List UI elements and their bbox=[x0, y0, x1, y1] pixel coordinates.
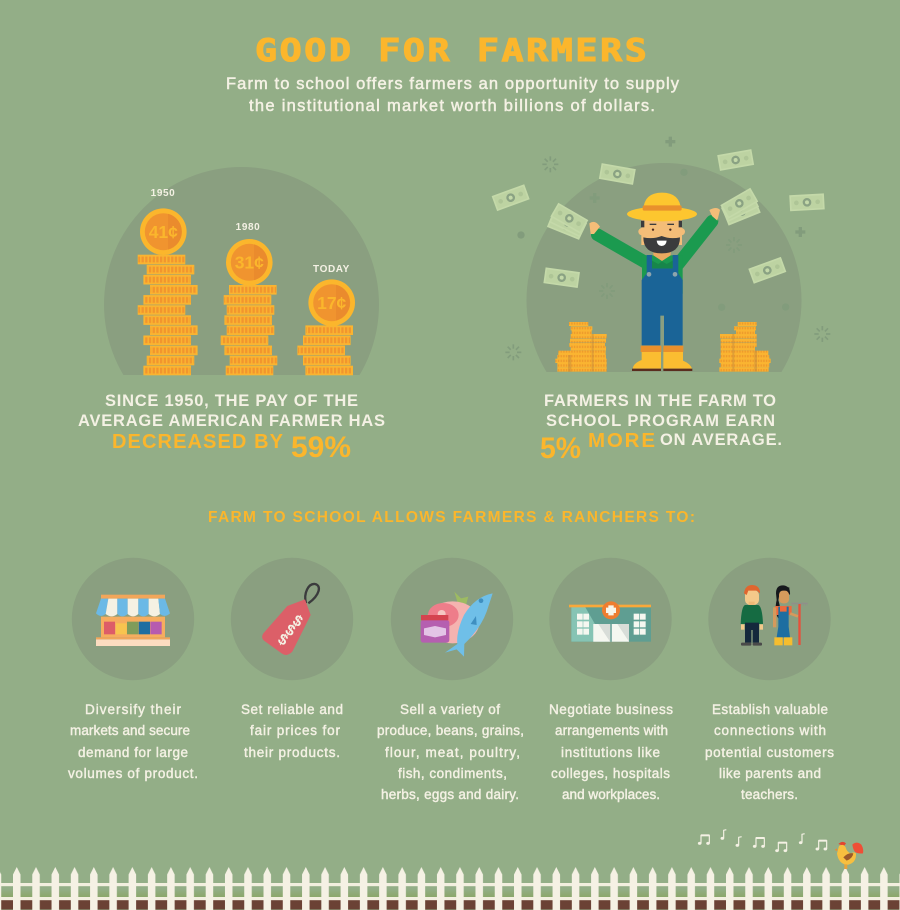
text: 5% more on average: MORE bbox=[588, 429, 655, 452]
text: herbs, eggs and dairy. bbox=[381, 787, 519, 802]
text: potential customers bbox=[705, 745, 834, 760]
coin stack 1980 bbox=[221, 285, 277, 375]
text: demand for large bbox=[78, 745, 188, 760]
rake bbox=[791, 603, 808, 645]
text: arrangements with bbox=[555, 723, 668, 738]
text: 5% more on average: FARMERS IN THE FARM TO bbox=[544, 392, 776, 410]
text: like parents and bbox=[719, 766, 821, 781]
text bbox=[549, 702, 673, 802]
music notes bbox=[698, 830, 827, 852]
label 1980: 1980 bbox=[236, 222, 260, 233]
circle background bbox=[231, 558, 353, 680]
panel: set prices bbox=[231, 558, 353, 760]
text: and workplaces. bbox=[562, 787, 660, 802]
grass bbox=[0, 889, 900, 900]
coin 41 cents: 41¢ bbox=[149, 222, 178, 242]
dome background bbox=[104, 167, 379, 375]
icon: market stall bbox=[96, 595, 170, 646]
text: fish, condiments, bbox=[398, 766, 507, 781]
text: markets and secure bbox=[70, 723, 190, 738]
label today: TODAY bbox=[313, 264, 350, 275]
text: pay decreased by 59%: DECREASED BY bbox=[112, 431, 284, 453]
text bbox=[68, 702, 198, 781]
boots bbox=[641, 346, 661, 352]
text: pay decreased by 59% bbox=[78, 392, 385, 464]
fence and ground bbox=[0, 866, 900, 910]
intro text: Farm to school offers farmers an opportunity to supply bbox=[226, 75, 680, 93]
dome background bbox=[526, 163, 802, 372]
panel: sell a variety bbox=[377, 558, 524, 802]
intro text bbox=[226, 75, 680, 115]
text bbox=[377, 702, 524, 802]
title: GOOD FOR FARMERS bbox=[255, 33, 647, 68]
coin 31 cents bbox=[226, 239, 273, 286]
coin stack 1950 bbox=[138, 255, 197, 375]
text: 5% more on average: SCHOOL PROGRAM EARN bbox=[546, 412, 775, 430]
panel: farmer with money bbox=[492, 136, 830, 372]
coin 41 cents bbox=[140, 208, 187, 255]
text: 5% more on average: ON AVERAGE. bbox=[660, 431, 782, 449]
coin 17 cents bbox=[308, 279, 355, 326]
label 1950: 1950 bbox=[151, 188, 175, 199]
hat bbox=[627, 207, 697, 221]
icon: price tag: $ bbox=[282, 621, 298, 640]
text: Negotiate business bbox=[549, 702, 673, 717]
icon: price tag: $ bbox=[275, 631, 291, 650]
text: volumes of product. bbox=[68, 766, 198, 781]
text: their products. bbox=[244, 745, 340, 760]
text: Diversify their bbox=[85, 702, 182, 717]
dollar bills bbox=[492, 149, 825, 288]
text: Set reliable and bbox=[241, 702, 343, 717]
icon: food products bbox=[421, 592, 493, 657]
text bbox=[241, 702, 343, 760]
icon: price tag: $ bbox=[290, 612, 306, 631]
panel: establish connections bbox=[705, 558, 834, 802]
text: institutions like bbox=[561, 745, 660, 760]
text: Sell a variety of bbox=[400, 702, 500, 717]
woman bbox=[773, 585, 798, 645]
text: teachers. bbox=[741, 787, 798, 802]
text bbox=[705, 702, 834, 802]
circle background bbox=[391, 558, 513, 680]
head bbox=[638, 228, 646, 235]
panel: negotiate arrangements bbox=[549, 558, 673, 802]
panel: diversify markets bbox=[68, 558, 198, 781]
section heading: FARM TO SCHOOL ALLOWS FARMERS & RANCHERS TO: bbox=[208, 509, 695, 526]
text: connections with bbox=[714, 723, 826, 738]
overalls bbox=[642, 255, 683, 345]
intro text: the institutional market worth billions of dollars. bbox=[249, 97, 655, 115]
decorative sparkles bbox=[505, 137, 830, 360]
text: pay decreased by 59%: 59% bbox=[291, 431, 351, 464]
circle background bbox=[708, 558, 831, 680]
fence rails bbox=[0, 883, 900, 900]
soil bbox=[0, 900, 900, 910]
coin pile left bbox=[555, 322, 607, 372]
coin 17 cents: 17¢ bbox=[317, 293, 347, 313]
coin stack today bbox=[298, 326, 353, 375]
hands bbox=[589, 222, 600, 234]
text: 5% more on average: 5% bbox=[540, 432, 581, 465]
icon: hospital bbox=[569, 601, 651, 642]
circle background bbox=[72, 558, 194, 680]
panel: pay decline coin chart bbox=[104, 167, 379, 376]
icon: rooster bbox=[835, 842, 863, 869]
arms and shirt bbox=[597, 221, 712, 264]
icon: man and woman farmers bbox=[741, 585, 808, 646]
man bbox=[741, 585, 763, 646]
text: fair prices for bbox=[250, 723, 340, 738]
coin pile right bbox=[719, 322, 771, 372]
icon: price tag bbox=[262, 584, 319, 655]
circle background bbox=[549, 558, 672, 680]
text: produce, beans, grains, bbox=[377, 723, 524, 738]
farmer bbox=[589, 193, 720, 371]
cash stack right bbox=[720, 188, 761, 226]
text: pay decreased by 59%: SINCE 1950, THE PAY OF THE bbox=[105, 392, 358, 410]
text: flour, meat, poultry, bbox=[385, 745, 520, 760]
text: 5% more on average bbox=[540, 392, 782, 465]
cash stack left bbox=[547, 203, 588, 240]
text: pay decreased by 59%: AVERAGE AMERICAN FARMER HAS bbox=[78, 412, 385, 430]
fence posts bbox=[0, 866, 900, 910]
text: colleges, hospitals bbox=[551, 766, 670, 781]
text: Establish valuable bbox=[712, 702, 828, 717]
coin 31 cents: 31¢ bbox=[235, 253, 264, 273]
